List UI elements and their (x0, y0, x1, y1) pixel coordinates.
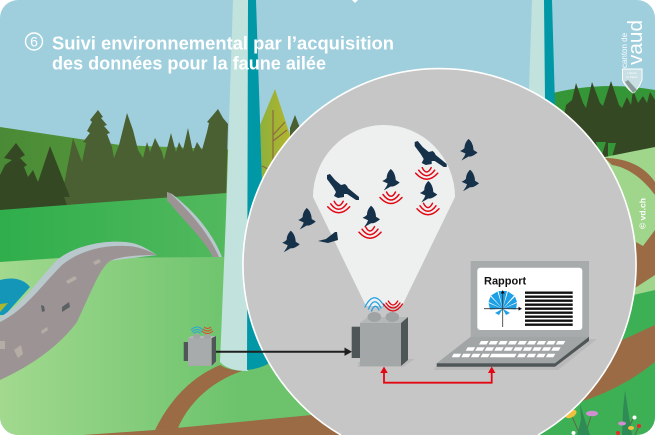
road (0, 242, 157, 380)
number badge (26, 33, 42, 50)
number badge: 6 (30, 34, 38, 50)
sensor device (352, 298, 415, 367)
report heading: Rapport (484, 276, 526, 288)
keyboard deck (437, 337, 589, 363)
blue signal (365, 298, 384, 311)
black arrow from sensor to device (216, 348, 352, 356)
logo: canton de Vaud: canton de (619, 33, 629, 68)
report text lines (525, 293, 573, 325)
logo: canton de Vaud: et Patrie (626, 75, 638, 79)
brown paths (84, 365, 340, 435)
title (26, 32, 394, 74)
far road (167, 192, 222, 257)
right hill (554, 86, 655, 112)
flowers (564, 390, 641, 435)
logo: canton de Vaud: vaud (625, 20, 647, 65)
laptop (433, 261, 597, 370)
small lighter firs (596, 142, 616, 158)
red detection signals (328, 168, 439, 238)
forest left (0, 109, 228, 212)
wind rose chart (484, 290, 522, 327)
small sensor device in landscape (184, 327, 219, 366)
forest right (560, 81, 655, 160)
detection beam (313, 125, 455, 306)
main wind turbine mast (220, 0, 268, 371)
title text: Suivi environnemental par l’acquisition (52, 32, 394, 54)
title text: des données pour la faune ailée (52, 52, 326, 74)
title text (52, 32, 394, 74)
copyright: © vd.ch (638, 198, 648, 229)
logo: canton de Vaud: Liberté (627, 71, 637, 75)
bird flock (282, 139, 479, 252)
keys (452, 341, 565, 357)
back hill left (0, 127, 228, 194)
foreground field (0, 257, 312, 435)
second wind turbine mast (529, 0, 555, 105)
yellow tree (260, 89, 300, 179)
main green hill (0, 193, 227, 262)
lake (0, 279, 30, 315)
logo: canton de Vaud (619, 20, 647, 93)
red signal (384, 301, 402, 311)
red two-way arrow (380, 366, 495, 383)
right field layers (540, 147, 655, 435)
panel: magnified circle (243, 69, 636, 435)
